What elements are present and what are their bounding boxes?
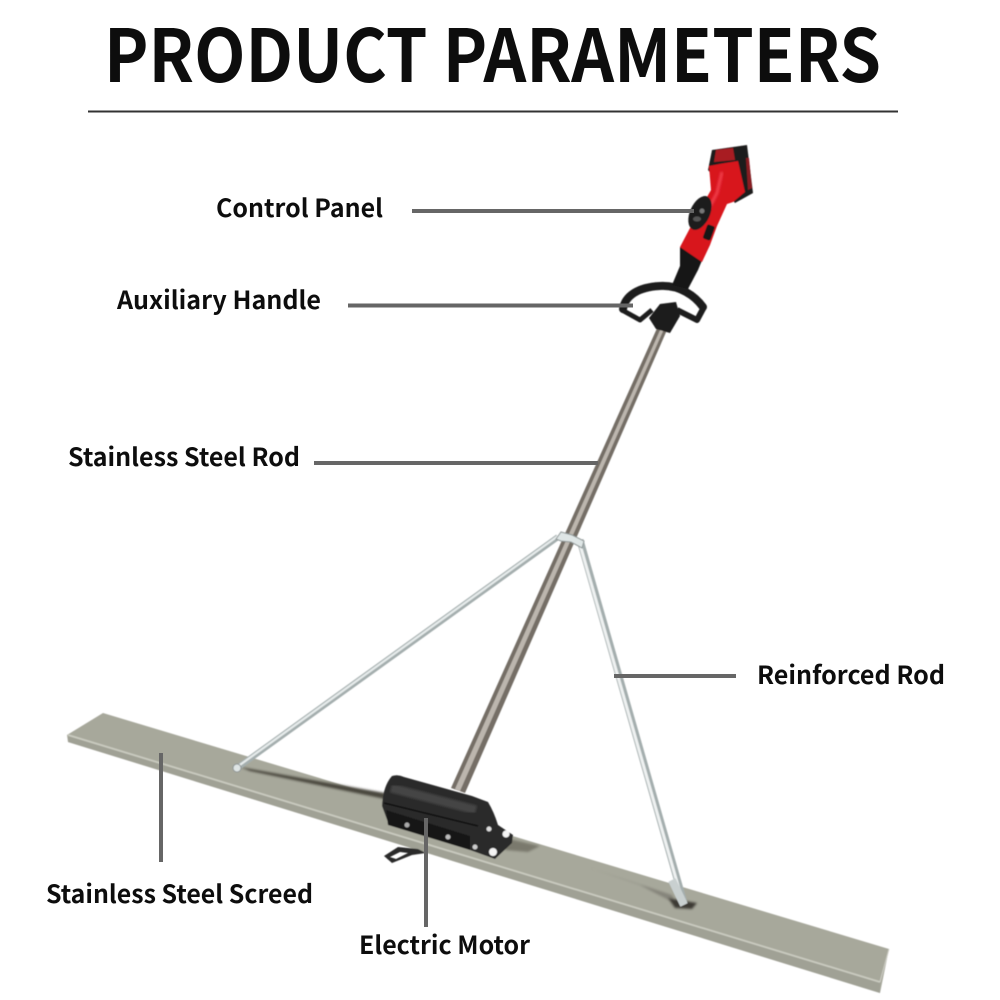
- reinforced rod: right brace: [579, 540, 684, 905]
- handle logo plate: [703, 224, 715, 241]
- label: stainless steel screed: Stainless Steel Screed: [46, 875, 313, 911]
- leader: electric motor: [424, 818, 428, 927]
- reinforced rod: left brace: [233, 536, 558, 772]
- label: auxiliary handle: Auxiliary Handle: [116, 281, 321, 317]
- leader: control panel: [412, 209, 694, 213]
- stainless steel rod: [451, 326, 667, 793]
- red handle body: [680, 161, 745, 262]
- motor clip: [384, 847, 426, 863]
- electric motor: [382, 775, 513, 859]
- leader: reinforced rod: [614, 674, 736, 678]
- control panel buttons: [684, 192, 716, 234]
- auxiliary handle: [622, 286, 704, 333]
- product illustration: concrete screed: [67, 145, 889, 993]
- rod clamp: [556, 532, 584, 548]
- label: reinforced rod: Reinforced Rod: [757, 656, 945, 692]
- label: stainless steel rod: Stainless Steel Rod: [68, 438, 300, 474]
- label: electric motor: Electric Motor: [359, 926, 530, 962]
- battery pack: [708, 145, 753, 203]
- blade shadows: [240, 767, 697, 909]
- leader: auxiliary handle: [348, 304, 633, 308]
- motor shaft collar: [672, 247, 703, 289]
- leader: stainless steel rod: [314, 461, 598, 465]
- title: PRODUCT PARAMETERS: [104, 0, 881, 104]
- header rule: [88, 110, 898, 112]
- screed blade: [67, 713, 889, 993]
- leader: stainless steel screed: [159, 753, 163, 862]
- label: control panel: Control Panel: [216, 189, 383, 225]
